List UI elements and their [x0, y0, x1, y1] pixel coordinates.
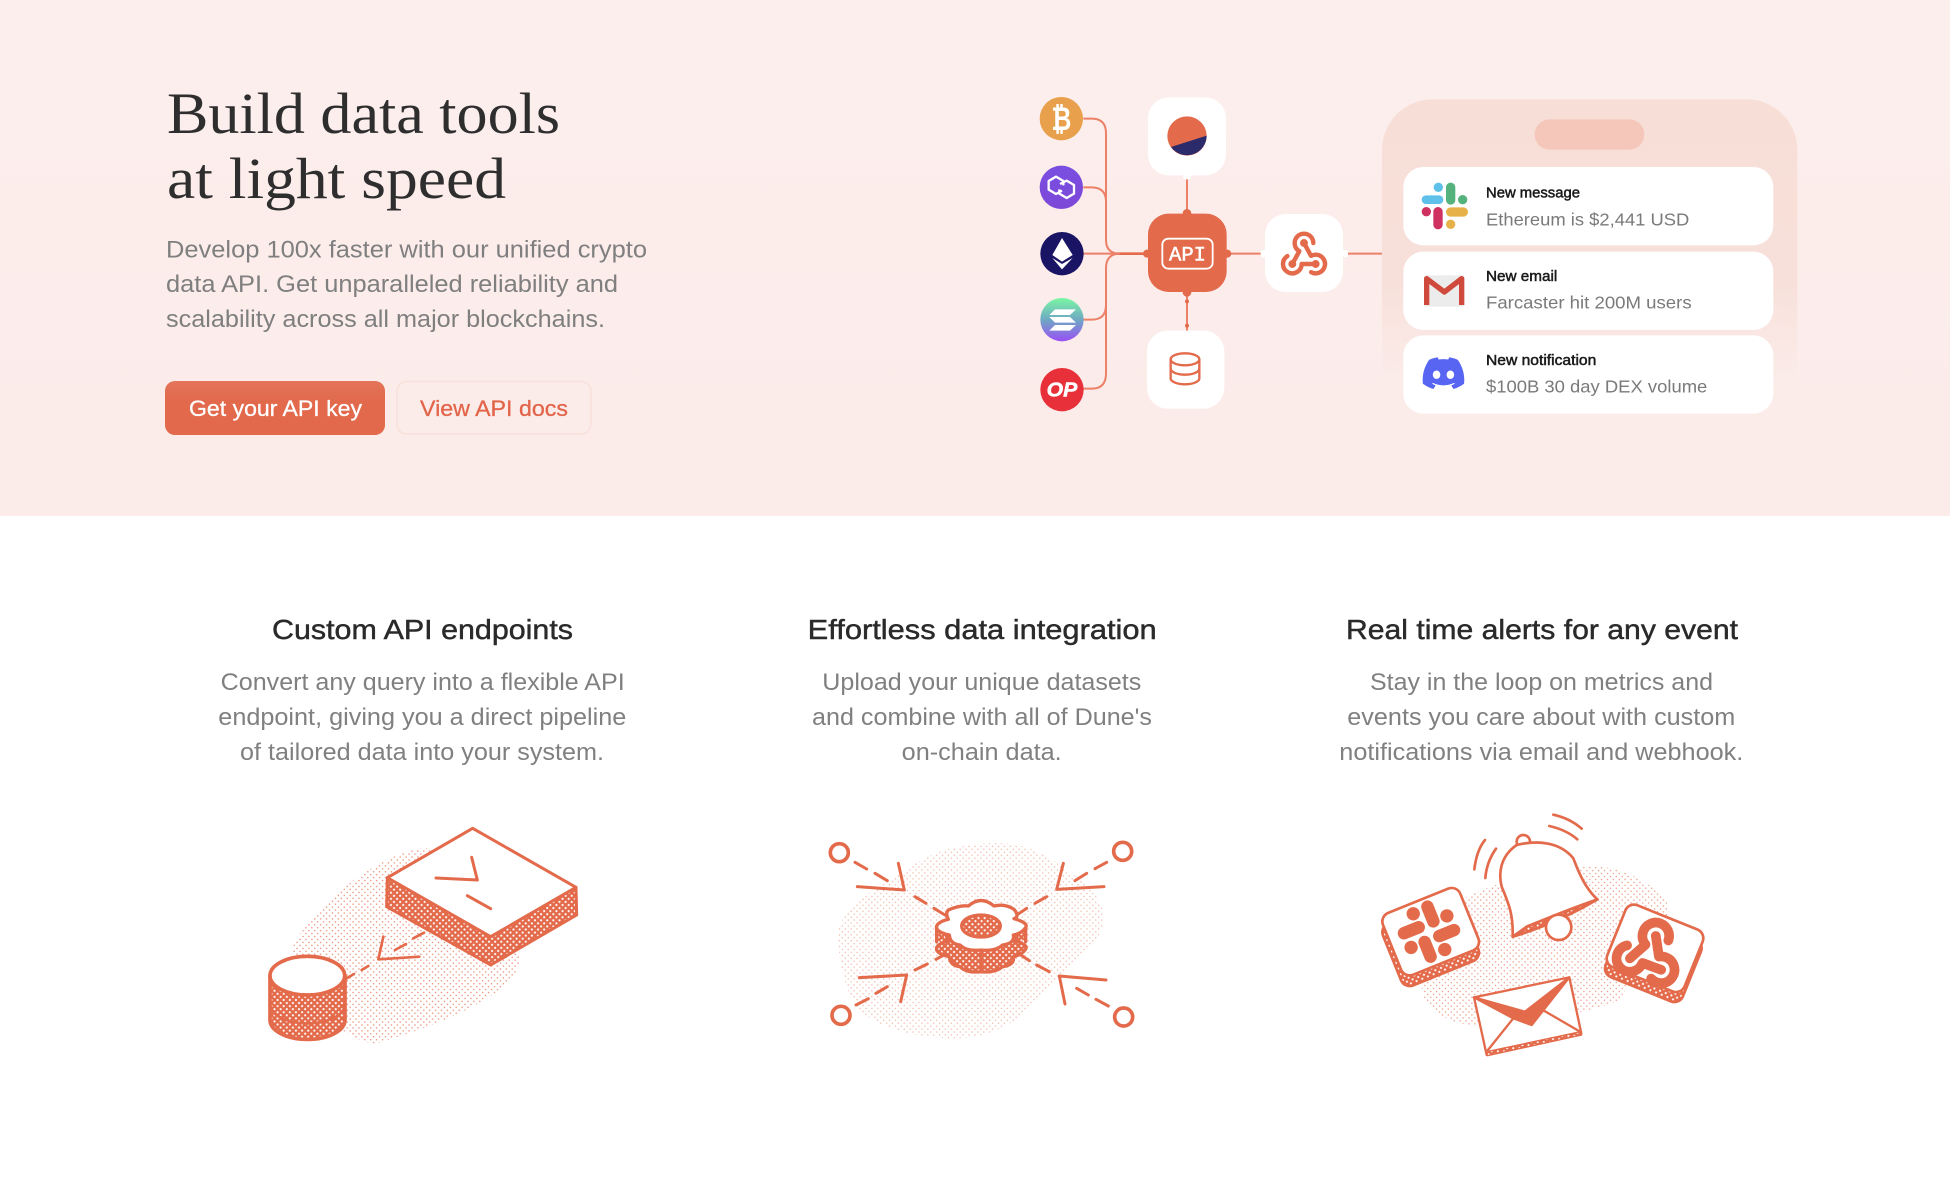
button: view API docs [397, 382, 591, 434]
description: endpoint, giving you a direct pipeline [218, 704, 626, 731]
halftone blob [292, 848, 520, 1043]
source nodes and arrows [830, 842, 1133, 1026]
description: Convert any query into a flexible API [221, 669, 625, 696]
card: API: API [1169, 244, 1206, 267]
notification: slack: New message [1486, 186, 1580, 202]
heading: Custom API endpoints [272, 614, 573, 645]
slack tile [1380, 885, 1482, 989]
hero description: Develop 100x faster with our unified crypto [166, 236, 647, 264]
diagram: API hub [1040, 97, 1382, 411]
feature column: effortless data integration [808, 614, 1157, 766]
envelope [1474, 977, 1582, 1056]
description: Stay in the loop on metrics and [1370, 669, 1713, 696]
feature column: real time alerts [1339, 614, 1743, 766]
description [1339, 669, 1743, 766]
illustration: slab and database [270, 828, 577, 1043]
description: and combine with all of Dune's [812, 704, 1152, 731]
notification: discord [1403, 335, 1773, 414]
notification: gmail: Farcaster hit 200M users [1486, 293, 1692, 313]
phone body [1382, 99, 1797, 416]
dashed arrow [347, 933, 424, 978]
icon: solana [1040, 298, 1084, 341]
button: get your API key [165, 381, 385, 435]
illustration: gear with inbound arrows [830, 842, 1133, 1038]
card: API [1143, 209, 1231, 328]
description [218, 669, 626, 766]
notification: discord: $100B 30 day DEX volume [1486, 377, 1707, 397]
database cylinder [270, 956, 345, 1039]
bell [1474, 815, 1597, 940]
notification: gmail [1403, 252, 1773, 330]
card: dune logo [1148, 97, 1226, 179]
panel: hero background [0, 0, 1950, 516]
description [812, 669, 1152, 766]
icon: optimism: OP [1047, 380, 1078, 402]
card: webhook [1261, 214, 1348, 292]
notification: discord: New notification [1486, 353, 1596, 369]
description: events you care about with custom [1347, 704, 1735, 731]
description: Upload your unique datasets [822, 669, 1141, 696]
hero description: scalability across all major blockchains. [166, 306, 605, 333]
slab [387, 828, 577, 965]
gear [936, 900, 1026, 972]
halftone blob [1422, 866, 1670, 1025]
panel: phone with notifications [1382, 99, 1797, 416]
connector lines [1083, 119, 1382, 389]
description: notifications via email and webhook. [1339, 739, 1743, 766]
card: database [1147, 331, 1224, 409]
button: get your API key: Get your API key [189, 396, 362, 421]
feature column: custom API endpoints [218, 614, 626, 766]
title: Build data tools [167, 81, 560, 146]
icon: bitcoin [1040, 97, 1083, 140]
icon: polygon [1040, 166, 1083, 209]
description: on-chain data. [902, 739, 1062, 766]
description: of tailored data into your system. [240, 739, 604, 766]
title [167, 81, 560, 211]
notification: gmail: New email [1486, 269, 1557, 285]
icon: ethereum [1040, 232, 1084, 275]
illustration: alerts [1380, 815, 1706, 1056]
hero description: data API. Get unparalleled reliability and [166, 271, 618, 298]
icon: optimism [1040, 368, 1084, 411]
notification: slack [1403, 167, 1773, 245]
hero description [166, 236, 647, 333]
heading: Real time alerts for any event [1346, 614, 1738, 645]
phone notch [1535, 119, 1644, 150]
webhook tile [1602, 902, 1706, 1005]
notification: slack: Ethereum is $2,441 USD [1486, 210, 1689, 230]
heading: Effortless data integration [808, 614, 1157, 645]
button: view API docs: View API docs [420, 396, 568, 421]
title: at light speed [167, 146, 506, 211]
icon: bitcoin: ₿ [1051, 100, 1071, 138]
halftone blob [838, 843, 1104, 1038]
